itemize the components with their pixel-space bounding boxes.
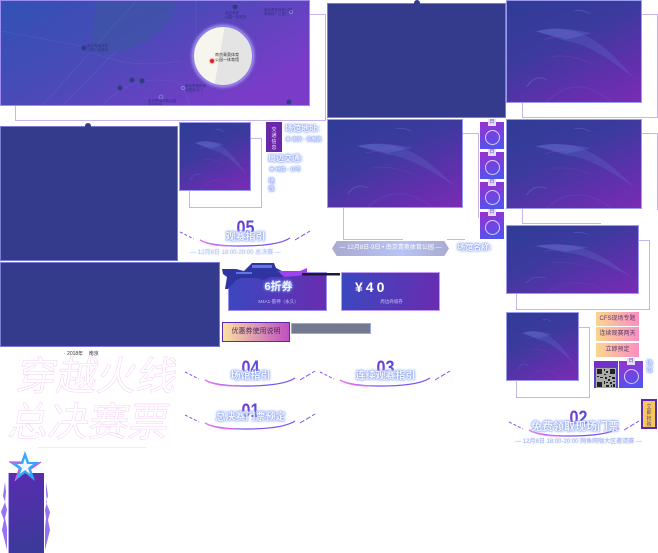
tagline: · 2018年 南京 — [64, 351, 99, 357]
notch marker — [85, 123, 91, 128]
frame line: top right panel — [522, 14, 658, 118]
panel: left dark block — [0, 126, 178, 261]
coupon value: 6折券 — [264, 281, 293, 293]
icon tile: eye: 日 — [489, 149, 494, 155]
number 02 — [559, 409, 598, 428]
map label — [225, 10, 246, 19]
poster thumbnail — [8, 473, 44, 553]
location name — [215, 52, 239, 62]
flames left — [1, 482, 7, 550]
map label: 公园一体育馆 — [225, 15, 246, 19]
title: 观赛指引 — [226, 232, 266, 243]
number 04 — [231, 359, 270, 378]
title: 场馆指引 — [230, 371, 270, 382]
venue name label: 场馆名称: — [457, 243, 492, 252]
location name: 南京青奥体育 — [215, 52, 239, 57]
coupon: 40 yuan — [341, 272, 440, 311]
number 05: 05 — [237, 218, 254, 239]
number 03 — [366, 359, 405, 378]
transport tag — [266, 122, 282, 152]
icon tile: gift — [619, 361, 643, 388]
icon: star — [9, 451, 42, 482]
QR code tile — [594, 361, 618, 388]
calligraphy title: 总决赛票 — [5, 401, 173, 445]
section header 03 — [320, 358, 450, 387]
date pill — [332, 241, 449, 256]
map label: 南京青奥体育公园 — [148, 99, 176, 103]
icon tile: flag — [480, 122, 504, 149]
number 02: 02 — [570, 408, 587, 429]
calligraphy title — [5, 355, 181, 445]
number 01: 01 — [242, 401, 259, 422]
coupon: 60 percent off — [228, 272, 327, 311]
frame line: lower right panel — [516, 327, 590, 398]
section header 02 — [508, 408, 642, 445]
icon tile: gift: 日 — [628, 358, 634, 364]
map label: 南京青奥体育 — [185, 84, 206, 88]
number 04: 04 — [242, 358, 259, 379]
button: buy now — [641, 399, 657, 429]
panel: center gradient — [327, 119, 463, 208]
arc ornament — [180, 230, 310, 247]
arc ornament — [184, 370, 316, 387]
nearby transport text: ◉ 地铁 · 10号 — [269, 167, 301, 173]
map roads and markers — [1, 1, 293, 105]
map callout: venue location circle — [193, 26, 253, 86]
map label: 南京奥体 — [225, 11, 239, 15]
date pill: — 12月8日-9日 • 南京青奥体育公园 — — [339, 245, 442, 251]
section header 01 — [184, 401, 316, 430]
map label — [185, 84, 206, 92]
button: watch two days — [596, 327, 639, 341]
icon tile: ticket: 日 — [489, 209, 494, 215]
button: coupon usage: 优惠券使用说明 — [232, 328, 280, 335]
icon tile: ticket — [480, 212, 504, 239]
title: 连续观赛指引 — [356, 371, 416, 382]
arc ornament — [508, 420, 640, 437]
notch marker — [414, 0, 420, 5]
venue address text: ◉ 南京 · 青奥路 — [286, 137, 321, 143]
frame line: second right panel — [522, 133, 658, 224]
section header 05 — [180, 218, 310, 256]
transport note: 地铁 — [268, 179, 274, 193]
side note: 场馆 — [646, 361, 652, 374]
arc ornament — [184, 414, 316, 430]
icon: rifle — [222, 263, 340, 289]
subtitle: — 12月8日 18:00-20:00 总决赛 — — [190, 250, 281, 256]
calligraphy title: 穿越火线 — [13, 355, 181, 399]
icon tile: cart — [480, 182, 504, 209]
button: book now: 立即预定 — [605, 347, 630, 353]
button: buy now: 立即抢购 — [646, 404, 652, 428]
title: 免费领取现场门票 — [531, 421, 619, 433]
icon tile: cart: 日 — [489, 179, 494, 185]
arc ornament — [320, 370, 450, 387]
panel: venue map — [0, 0, 310, 106]
number 05 — [226, 219, 265, 238]
placeholder bar — [291, 323, 371, 334]
number 03: 03 — [377, 358, 394, 379]
panel: lower right gradient — [506, 312, 579, 381]
icon tile: flag: 日 — [489, 119, 494, 125]
map label — [87, 44, 108, 52]
panel: left lower dark block — [0, 262, 220, 347]
section header 04 — [184, 358, 316, 387]
map label: 公园南大门 — [185, 88, 202, 92]
venue address heading: 场馆地址: — [285, 124, 320, 133]
panel: map frame line — [15, 14, 326, 121]
nearby transport heading: 周边交通: — [268, 154, 303, 163]
number 01 — [231, 402, 270, 421]
QR code — [596, 368, 616, 388]
title: 总决赛门票预定 — [216, 412, 286, 423]
coupon value: ¥40 — [355, 279, 387, 295]
calligraphy underline — [38, 447, 146, 448]
map label: 公园一足球场 — [87, 48, 108, 52]
subtitle: — 12月8日 18:00-20:00 网鱼网咖大区邀请赛 — — [515, 439, 642, 445]
location pin — [209, 58, 215, 64]
frame line: center panel — [343, 133, 479, 240]
map label: 南京青奥体育 — [87, 44, 108, 48]
map label: 体育场一工程门 — [264, 12, 288, 16]
panel: top center block — [327, 3, 506, 118]
location name: 公园一体育馆 — [215, 57, 239, 62]
frame line: third right panel — [516, 240, 650, 310]
button: CFS live topic — [596, 312, 639, 326]
map label — [148, 98, 176, 106]
frame line: small panel — [189, 138, 262, 208]
button: coupon usage — [222, 322, 290, 342]
panel: small gradient — [179, 122, 251, 191]
coupon caption: 周边商城券 — [380, 299, 403, 304]
map label — [264, 8, 292, 16]
map label: 南京青奥体育公园 — [264, 8, 292, 12]
panel: second right gradient — [506, 119, 642, 209]
transport tag: 交通信息 — [271, 127, 276, 151]
button: CFS live topic: CFS现场专题 — [599, 316, 636, 322]
coupon caption: M4A1-雷神（永久） — [258, 299, 299, 304]
panel: top right gradient — [506, 0, 642, 103]
button: book now — [596, 343, 639, 357]
icon tile: eye — [480, 152, 504, 179]
button: watch two days: 连续观赛两天 — [599, 331, 636, 337]
panel: third right gradient — [506, 225, 639, 294]
flames right — [45, 482, 50, 550]
